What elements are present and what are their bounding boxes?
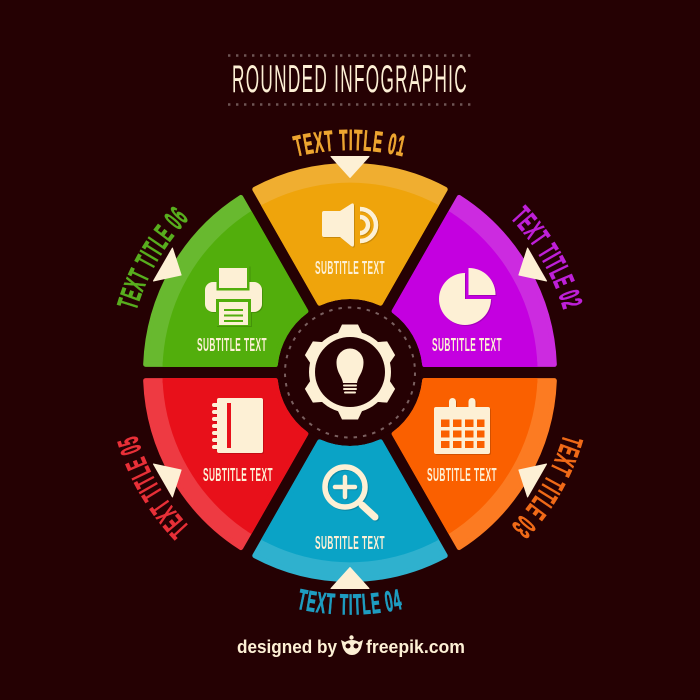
panel: text title 06: TEXT TITLE 06 (116, 206, 188, 308)
panel: text title 04: TEXT TITLE 04 (299, 588, 402, 615)
panel: text title 05: SUBTITLE TEXT (203, 465, 273, 485)
footer credit: designed by (237, 637, 337, 657)
panel: text title 01: SUBTITLE TEXT (315, 258, 385, 278)
icon: freepik mascot (341, 635, 363, 655)
footer credit (237, 635, 465, 657)
icon: notebook (214, 398, 263, 453)
icon: light bulb (336, 348, 364, 392)
panel: text title 06 (116, 194, 308, 367)
panel: text title 05 (117, 378, 308, 550)
icon: pie chart (439, 268, 496, 325)
icon: magnifier (325, 467, 375, 517)
panel: text title 03: SUBTITLE TEXT (427, 465, 497, 485)
panel: text title 02: TEXT TITLE 02 (512, 204, 582, 310)
panel: text title 04 (252, 439, 448, 615)
panel: text title 02 (392, 194, 582, 367)
icon: calendar (434, 398, 490, 454)
footer credit: freepik.com (366, 637, 465, 657)
panel: text title 01: TEXT TITLE 01 (292, 130, 405, 156)
panel: text title 03: TEXT TITLE 03 (512, 437, 584, 538)
panel: text title 02: SUBTITLE TEXT (432, 335, 502, 355)
panel: text title 04: SUBTITLE TEXT (315, 533, 385, 553)
icon: printer (205, 266, 262, 326)
panel: text title 05: TEXT TITLE 05 (117, 436, 188, 541)
icon: gear (302, 324, 398, 420)
panel: text title 06: SUBTITLE TEXT (197, 335, 267, 355)
panel: text title 01 (252, 130, 448, 306)
panel: text title 03 (392, 378, 584, 550)
icon: speaker (322, 203, 376, 247)
hub (279, 302, 421, 444)
